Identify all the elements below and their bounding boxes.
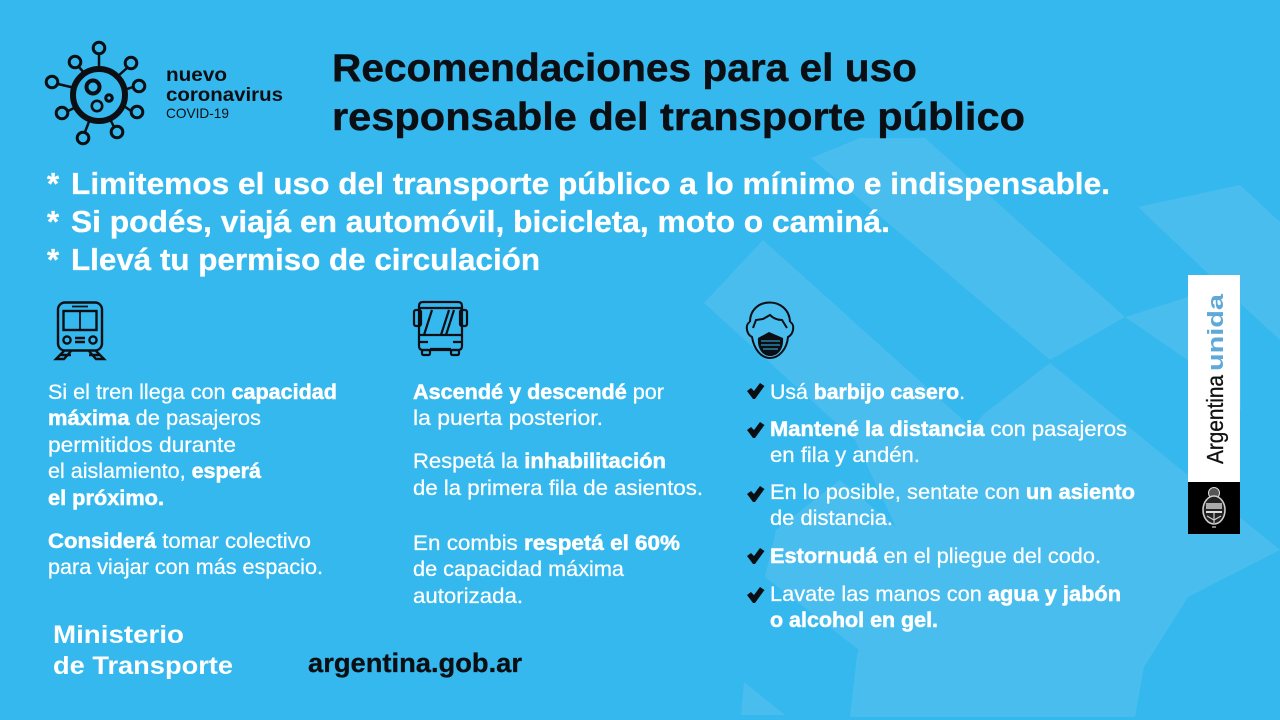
- key recommendations: Si podés, viajá en automóvil, bicicleta, moto o caminá.: [71, 204, 890, 239]
- column: mask advice checklist: Lavate las manos con agua y jabón: [770, 583, 1121, 606]
- logo text: nuevo coronavirus COVID-19: coronavirus: [166, 85, 283, 106]
- ministry signature: [53, 621, 233, 680]
- column: bus advice: En combis respetá el 60%: [413, 532, 680, 555]
- logo text: nuevo coronavirus COVID-19: COVID-19: [166, 105, 229, 121]
- column: mask advice checklist: en fila y andén.: [770, 444, 920, 467]
- icon: face with mask: [747, 302, 793, 358]
- key recommendations: Limitemos el uso del transporte público a lo mínimo e indispensable.: [71, 166, 1110, 201]
- ministry signature: Ministerio: [53, 621, 184, 649]
- column: mask advice checklist: Mantené la distancia con pasajeros: [770, 418, 1127, 441]
- column: train advice: permitidos durante: [48, 434, 236, 457]
- column: bus advice: la puerta posterior.: [413, 407, 603, 430]
- column: train advice: el aislamiento, esperá: [48, 460, 261, 483]
- column: bus advice: de la primera fila de asientos.: [413, 477, 703, 500]
- column: train advice: máxima de pasajeros: [48, 407, 261, 430]
- column: bus advice: Respetá la inhabilitación: [413, 450, 666, 473]
- column: train advice: Si el tren llega con capacidad: [48, 381, 337, 404]
- badge: Argentina unida: unida: [1203, 293, 1228, 371]
- badge: Argentina unida: Argentina: [1202, 375, 1228, 464]
- icon: coronavirus: [46, 42, 145, 144]
- key recommendations: Llevá tu permiso de circulación: [71, 242, 540, 277]
- website: argentina.gob.ar: [308, 648, 522, 678]
- column: mask advice checklist: Usá barbijo casero.: [770, 381, 965, 404]
- title: [332, 47, 1025, 139]
- logo text: nuevo coronavirus COVID-19: nuevo: [166, 65, 227, 86]
- column: mask advice checklist: En lo posible, sentate con un asiento: [770, 481, 1135, 504]
- column: train advice: Considerá tomar colectivo: [48, 530, 311, 553]
- column: bus advice: autorizada.: [413, 585, 523, 608]
- column: mask advice checklist: Estornudá en el pliegue del codo.: [770, 545, 1101, 568]
- key recommendations: *: [47, 242, 60, 277]
- column: mask advice checklist: o alcohol en gel.: [770, 609, 938, 632]
- ministry signature: de Transporte: [53, 652, 233, 680]
- key recommendations: *: [47, 166, 60, 201]
- column: mask advice checklist: de distancia.: [770, 507, 893, 530]
- title: responsable del transporte público: [332, 96, 1025, 139]
- title: Recomendaciones para el uso: [332, 47, 917, 90]
- column: train advice: [48, 381, 337, 579]
- icon: bus: [414, 302, 467, 355]
- column: bus advice: Ascendé y descendé por: [413, 381, 664, 404]
- column: train advice: para viajar con más espacio.: [48, 556, 323, 579]
- column: mask advice checklist: [747, 381, 1135, 632]
- logo text: nuevo coronavirus COVID-19: [166, 65, 283, 121]
- key recommendations: *: [47, 204, 60, 239]
- column: bus advice: [413, 381, 703, 608]
- badge: Argentina unida: [1188, 275, 1240, 534]
- column: bus advice: de capacidad máxima: [413, 558, 624, 581]
- column: train advice: el próximo.: [48, 487, 164, 510]
- key recommendations: [47, 166, 1110, 277]
- icon: train: [56, 302, 104, 359]
